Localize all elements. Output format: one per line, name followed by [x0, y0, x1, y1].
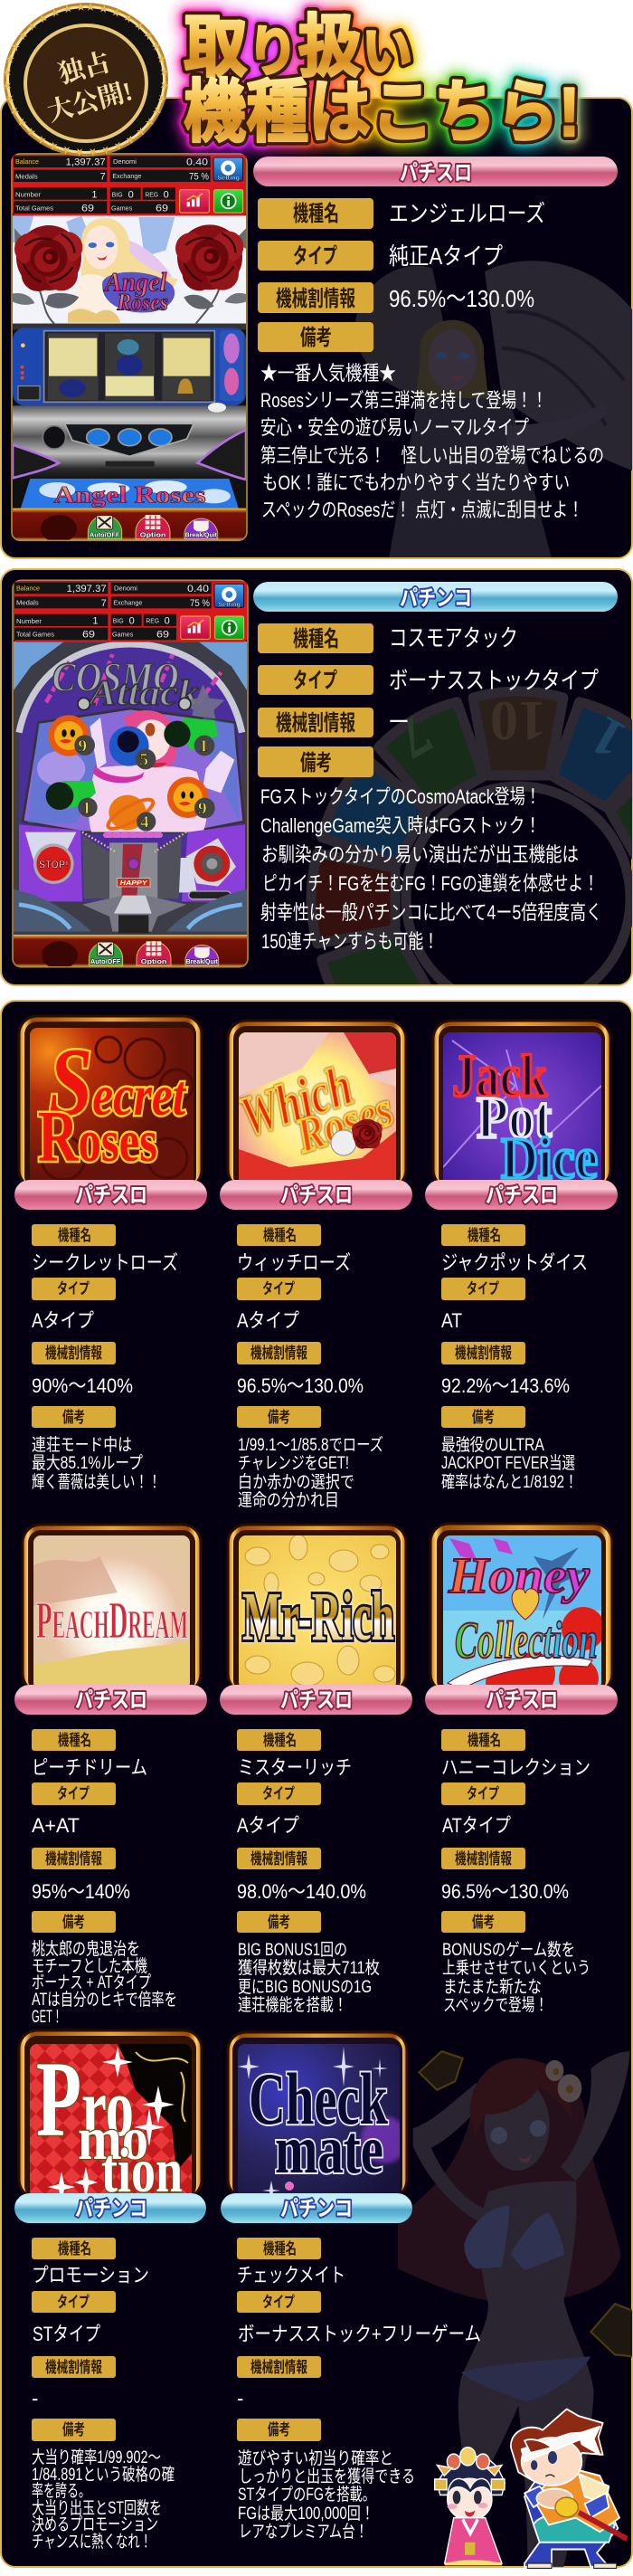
spec text: タイプ [262, 2294, 295, 2311]
badge: exclusive reveal: 大公開! [44, 76, 136, 128]
spec text: 決めるプロモーション [32, 2514, 158, 2534]
spec text: 機械割情報 [45, 2359, 102, 2376]
category bar [425, 1180, 618, 1210]
field: type: タイプ [293, 244, 337, 269]
spec text: 1/99.1～1/85.8でローズ [238, 1435, 383, 1455]
spec text: BONUSのゲーム数を [442, 1940, 575, 1960]
spec text: 機種名 [468, 1732, 501, 1749]
spec text: 95%～140% [32, 1880, 130, 1903]
spec text: モチーフとした本機 [32, 1956, 147, 1976]
description text: FGストックタイプのCosmoAtack登場！ [260, 785, 541, 808]
spec text [32, 1729, 177, 2027]
spec text: 機種名 [263, 2240, 297, 2258]
logo art: mo [78, 2104, 148, 2172]
game status header: 7 [101, 598, 107, 609]
spec text: 機械割情報 [45, 1345, 102, 1362]
background art: number wheel ghost [306, 686, 632, 984]
princess [435, 2448, 505, 2563]
control panel [13, 403, 246, 480]
category bar: パチスロ [486, 1183, 558, 1208]
spec text: 備考 [472, 1409, 495, 1426]
game status header: 1 [92, 616, 98, 627]
field: type: 純正Aタイプ [389, 242, 503, 270]
spec text: ウィッチローズ [237, 1251, 351, 1274]
spec text: 率を誇る。 [32, 2481, 90, 2501]
game status header: 1,397.37 [66, 157, 106, 168]
field: machine name: エンジェルローズ [389, 200, 545, 227]
spec text: 備考 [268, 1409, 290, 1426]
pachinko artwork: Attack [86, 672, 199, 713]
field: machine name: 機種名 [293, 627, 339, 651]
logo art [228, 2032, 408, 2201]
background art: number wheel ghost: 7 [387, 703, 442, 770]
game status header: 69 [156, 630, 169, 641]
button bar: Auto/OFF [90, 959, 121, 965]
game status header: 0 [165, 616, 170, 627]
machine card: Promotion [14, 2030, 206, 2552]
spec text: 96.5%～130.0% [237, 1374, 364, 1397]
spec text: 機種名 [58, 1732, 91, 1749]
spec text: 大当り出玉とST回数を [32, 2498, 162, 2518]
machine card: Secret Roses [14, 1016, 207, 1492]
pachinko artwork: 5 [139, 751, 148, 770]
spec text: 1/84.891という破格の確 [32, 2465, 175, 2485]
spec text: 運命の分かれ目 [238, 1490, 339, 1510]
panel: featured pachislot Angel Roses [1, 98, 632, 558]
spec text: 備考 [62, 2421, 85, 2438]
logo art [23, 1525, 201, 1693]
spec text: タイプ [57, 2294, 90, 2311]
button bar: Auto/OFF [90, 533, 120, 539]
title: rainbow gold heading: 機種はこちら! [184, 74, 580, 151]
button bar [13, 509, 246, 543]
spec text: 機械割情報 [250, 1345, 307, 1362]
category bar: パチスロ [486, 1688, 558, 1713]
game status header: Total Games [16, 632, 55, 639]
game status header: Balance [16, 585, 40, 592]
spec text: チャンスに熱くなれ！ [32, 2532, 152, 2552]
game status header: Number [16, 619, 43, 625]
spec text: スペックで登場！ [443, 1995, 548, 2015]
spec text: ATタイプ [442, 1814, 511, 1837]
spec text: STタイプのFGを搭載。 [238, 2485, 375, 2505]
spec text: 最強役のULTRA [441, 1435, 544, 1455]
logo art: Pot [477, 1085, 552, 1151]
game status header: 7 [100, 172, 106, 183]
spec text: タイプ [57, 1785, 90, 1802]
spec text [32, 2238, 175, 2552]
background art: angel ghost [354, 261, 632, 558]
spec text [441, 1224, 588, 1492]
spec text: FGは最大100,000回！ [238, 2504, 374, 2524]
logo art: Pro [36, 2039, 134, 2159]
logo art: Roses [288, 1081, 399, 1164]
spec text: シークレットローズ [32, 1251, 178, 1274]
spec text: ボーナス + ATタイプ [32, 1972, 151, 1992]
category bar: pachislot: パチスロ [400, 161, 472, 185]
category bar [220, 1180, 412, 1210]
category bar: pachinko: パチンコ [400, 586, 472, 611]
logo art: Which [233, 1055, 360, 1148]
spec text: 機種名 [263, 1732, 297, 1749]
logo art: Roses [38, 1098, 157, 1177]
spec text [237, 1729, 380, 2015]
spec text: 機種名 [468, 1227, 501, 1244]
spec text: 機種名 [263, 1227, 297, 1244]
field: payout: 機械割情報 [276, 711, 355, 736]
slot machine screen: Angel Roses [12, 154, 247, 543]
reels [13, 324, 246, 405]
field: machine name: 機種名 [293, 202, 339, 226]
spec text: タイプ [467, 1280, 499, 1298]
characters: princess and samurai boy [435, 2409, 627, 2568]
field: payout [258, 708, 410, 737]
spec text: 92.2%～143.6% [441, 1374, 570, 1397]
logo art: Dice [501, 1126, 598, 1192]
spec text: 機械割情報 [455, 1345, 512, 1362]
title: rainbow gold heading: 取り扱い [184, 9, 412, 86]
field: type [258, 241, 503, 271]
game status header [14, 581, 247, 642]
game status header: 75 % [189, 172, 209, 183]
category bar [221, 2193, 412, 2223]
pachinko artwork: 9 [198, 800, 207, 819]
spec text: 更にBIG BONUSの1G [238, 1978, 372, 1997]
background art: number wheel ghost: 10 [490, 689, 546, 751]
description text: 安心・安全の遊び易いノーマルタイプ [260, 416, 529, 439]
spec text: タイプ [57, 1280, 90, 1298]
logo art [19, 2030, 202, 2206]
logo art: Mr-Rich [242, 1579, 394, 1655]
description text: 150連チャンすらも可能！ [261, 930, 439, 953]
spec text: STタイプ [33, 2323, 100, 2345]
samurai boy [511, 2409, 619, 2567]
category bar: パチスロ [280, 1183, 353, 1208]
logo art [430, 1524, 612, 1699]
spec text: 機械割情報 [250, 1850, 307, 1868]
spec text: A+AT [32, 1814, 80, 1837]
logo art: Check [249, 2058, 388, 2140]
spec text: 備考 [62, 1914, 85, 1931]
field: payout: 96.5%～130.0% [389, 285, 534, 312]
spec text: プロモーション [32, 2264, 149, 2286]
button bar: Break/Quit [186, 959, 219, 965]
game status header: Setting [218, 602, 241, 608]
spec text: Aタイプ [237, 1309, 299, 1332]
spec text: ハニーコレクション [441, 1756, 590, 1779]
game status header: Medals [15, 174, 38, 180]
machine card: Peach Dream [14, 1525, 207, 2027]
spec text: 備考 [62, 1409, 85, 1426]
field: type: タイプ [293, 669, 337, 693]
spec text: 備考 [268, 2421, 290, 2438]
spec text: 90%～140% [32, 1374, 133, 1397]
category bar: pachislot [253, 157, 618, 186]
spec text: 機種名 [58, 2240, 91, 2258]
background art: ghost girl and stars [398, 2051, 633, 2567]
pachinko artwork: 4 [140, 813, 149, 832]
artwork top [13, 215, 246, 324]
category bar: パチスロ [280, 1688, 353, 1713]
field: payout [258, 282, 534, 313]
game status header: Games [111, 205, 133, 212]
badge: exclusive reveal: 独占 [55, 47, 113, 90]
field: machine name [258, 198, 545, 229]
game status header [13, 155, 246, 215]
game status header: 0 [164, 189, 169, 200]
logo art: tion [101, 2136, 183, 2206]
field: type [258, 665, 599, 695]
pachinko artwork [14, 642, 247, 935]
spec text: 最大85.1%ループ [32, 1453, 143, 1473]
description text: お馴染みの分かり易い演出だが出玉機能は [261, 843, 579, 866]
game status header: Balance [15, 159, 39, 166]
field: notes [258, 746, 373, 777]
spec text: 上乗せさせていくという [442, 1958, 590, 1978]
category bar: pachinko [253, 582, 618, 612]
logo art [228, 1525, 406, 1693]
spec text: チャレンジをGET! [238, 1454, 349, 1473]
category bar: パチンコ [280, 2197, 353, 2221]
game status header: Number [15, 193, 42, 199]
slot machine screen: Cosmo Attack [13, 580, 248, 969]
field: payout: ー [388, 708, 410, 736]
logo art: Secret [49, 1029, 187, 1136]
title: rainbow gold heading: 機種はこちら! [184, 74, 580, 151]
description text [260, 785, 602, 953]
pachinko artwork: STOP! [39, 859, 69, 871]
machine card: Honey Collection [425, 1524, 618, 2015]
game status header: Total Games [15, 205, 54, 212]
game status header: 1,397.37 [67, 584, 107, 594]
spec text: 白か赤かの選択で [238, 1472, 354, 1492]
button bar: Option [140, 533, 165, 539]
spec text: GET！ [32, 2008, 62, 2027]
game status header: 0 [128, 189, 134, 200]
pachinko artwork: HAPPY [120, 879, 148, 887]
game status header: Denomi [114, 585, 137, 592]
spec text: しっかりと出玉を獲得できる [239, 2467, 415, 2486]
category bar [14, 2193, 206, 2223]
spec text: JACKPOT FEVER当選 [441, 1453, 575, 1473]
category bar: パチンコ [75, 2197, 147, 2221]
Angel Roses bottom plate: Angel Roses [53, 482, 206, 509]
description text [260, 362, 604, 521]
category bar: パチスロ [75, 1688, 147, 1713]
spec text: 98.0%～140.0% [237, 1880, 366, 1903]
game status header: Setting [217, 176, 240, 182]
spec text [237, 1224, 383, 1510]
field: machine name: コスモアタック [389, 624, 518, 651]
spec text: 確率はなんと1/8192！ [441, 1472, 578, 1492]
machine card: Mr-Rich [220, 1525, 412, 2015]
spec text: タイプ [467, 1785, 499, 1802]
spec text: 備考 [472, 1914, 495, 1931]
button bar: Break/Quit [185, 533, 218, 539]
spec text: レアなプレミアム台！ [239, 2522, 368, 2542]
pachinko artwork: 1 [199, 737, 208, 756]
spec text: 96.5%～130.0% [441, 1880, 569, 1903]
pachinko artwork: COSMO [52, 655, 179, 700]
title: rainbow gold heading: 取り扱い [184, 9, 412, 86]
game status header: 69 [81, 203, 94, 214]
title: rainbow gold heading: 取り扱い [184, 9, 412, 86]
game status header: 75 % [190, 598, 210, 609]
category bar [14, 1685, 207, 1715]
spec text: 機械割情報 [45, 1850, 102, 1868]
spec text: 連荘モード中は [32, 1435, 132, 1455]
pachinko artwork: 1 [82, 799, 91, 818]
spec text: 桃太郎の鬼退治を [32, 1939, 140, 1959]
machine card: Jack Pot Dice [425, 1021, 618, 1492]
spec text: 機械割情報 [250, 2359, 307, 2376]
pachinko artwork: 9 [78, 737, 87, 756]
spec text [441, 1729, 590, 2015]
category bar [14, 1180, 207, 1210]
field: notes: 備考 [300, 326, 332, 350]
game status header: Exchange [113, 600, 142, 606]
game status header: BIG [112, 192, 123, 198]
spec text: またまた新たな [443, 1977, 542, 1997]
spec text: ミスターリッチ [238, 1756, 352, 1779]
game status header: 0 [129, 616, 135, 627]
button bar: Option [141, 959, 166, 965]
Angel Roses bottom plate [21, 479, 239, 509]
logo art [433, 1021, 610, 1192]
field: machine name [258, 623, 518, 653]
game status header: 0.40 [187, 584, 209, 594]
artwork top: Angel [103, 269, 167, 298]
title: rainbow gold heading: 取り扱い [184, 9, 412, 86]
spec text: AT [441, 1309, 462, 1332]
game status header: BIG [113, 619, 124, 625]
logo art: Jack [452, 1043, 547, 1109]
spec text: 備考 [268, 1914, 290, 1931]
artwork top: Roses [116, 288, 168, 315]
logo art [19, 1016, 202, 1189]
spec text: 輝く薔薇は美しい！！ [32, 1472, 161, 1492]
game status header: 69 [156, 203, 168, 214]
panel: featured pachinko Cosmo Attack [0, 568, 633, 986]
logo art: PEACHDREAM [36, 1591, 188, 1649]
game status header: REG [145, 192, 158, 198]
title: rainbow gold heading [184, 9, 580, 151]
game status header: 1 [91, 189, 97, 200]
title: rainbow gold heading: 機種はこちら! [184, 74, 580, 151]
spec text: ATは自分のヒキで倍率を [32, 1990, 177, 2010]
button bar [14, 935, 247, 969]
spec text: ピーチドリーム [32, 1756, 147, 1779]
category bar: パチスロ [75, 1183, 147, 1208]
game status header: Games [112, 632, 134, 639]
game status header: Medals [16, 601, 39, 607]
spec text: ボーナスストック+フリーゲーム [238, 2323, 481, 2345]
game status header: 69 [82, 630, 95, 641]
spec text: 遊びやすい初当り確率と [238, 2448, 393, 2468]
spec text: Aタイプ [237, 1814, 299, 1837]
machine card: Checkmate [221, 2032, 481, 2542]
logo art: Honey [448, 1548, 590, 1604]
spec text: 機械割情報 [455, 1850, 512, 1868]
spec text: Aタイプ [32, 1309, 94, 1332]
spec text: - [32, 2387, 38, 2410]
panel: machine list [1, 1001, 633, 2568]
spec text: 大当り確率1/99.902～ [32, 2448, 161, 2467]
description text: ★一番人気機種★ [260, 362, 396, 385]
spec text: タイプ [262, 1280, 295, 1298]
category bar [220, 1685, 412, 1715]
description text: ChallengeGame突入時はFGストック！ [260, 814, 541, 837]
spec text: 連荘機能を搭載！ [238, 1995, 347, 2015]
logo art [228, 1021, 406, 1189]
field: payout: 機械割情報 [276, 287, 355, 311]
game status header: 0.40 [186, 157, 208, 168]
spec text: BIG BONUS1回の [238, 1941, 347, 1960]
spec text: 機種名 [58, 1227, 91, 1244]
spec text: - [237, 2387, 243, 2410]
game status header: REG [146, 619, 159, 625]
badge: exclusive reveal: ★★★★★★★★★★★★★★★★★★★★★★★★★★★★★★★★★★★★ [3, 3, 169, 157]
description text: Rosesシリーズ第三弾満を持して登場！！ [260, 389, 547, 412]
field: notes [258, 322, 373, 352]
game status header: Denomi [113, 159, 137, 166]
spec text [237, 2238, 481, 2542]
spec text: ジャクポットダイス [441, 1251, 588, 1274]
spec text: タイプ [262, 1785, 295, 1802]
title: rainbow gold heading: 機種はこちら! [184, 74, 580, 151]
spec text: 獲得枚数は最大711枚 [238, 1958, 380, 1978]
field: notes: 備考 [300, 751, 332, 775]
spec text: チェックメイト [237, 2264, 345, 2286]
logo art: mate [275, 2112, 383, 2188]
game status header: Exchange [112, 174, 141, 180]
category bar [425, 1685, 618, 1715]
spec text [32, 1224, 178, 1492]
machine card: Which Roses [220, 1021, 412, 1510]
